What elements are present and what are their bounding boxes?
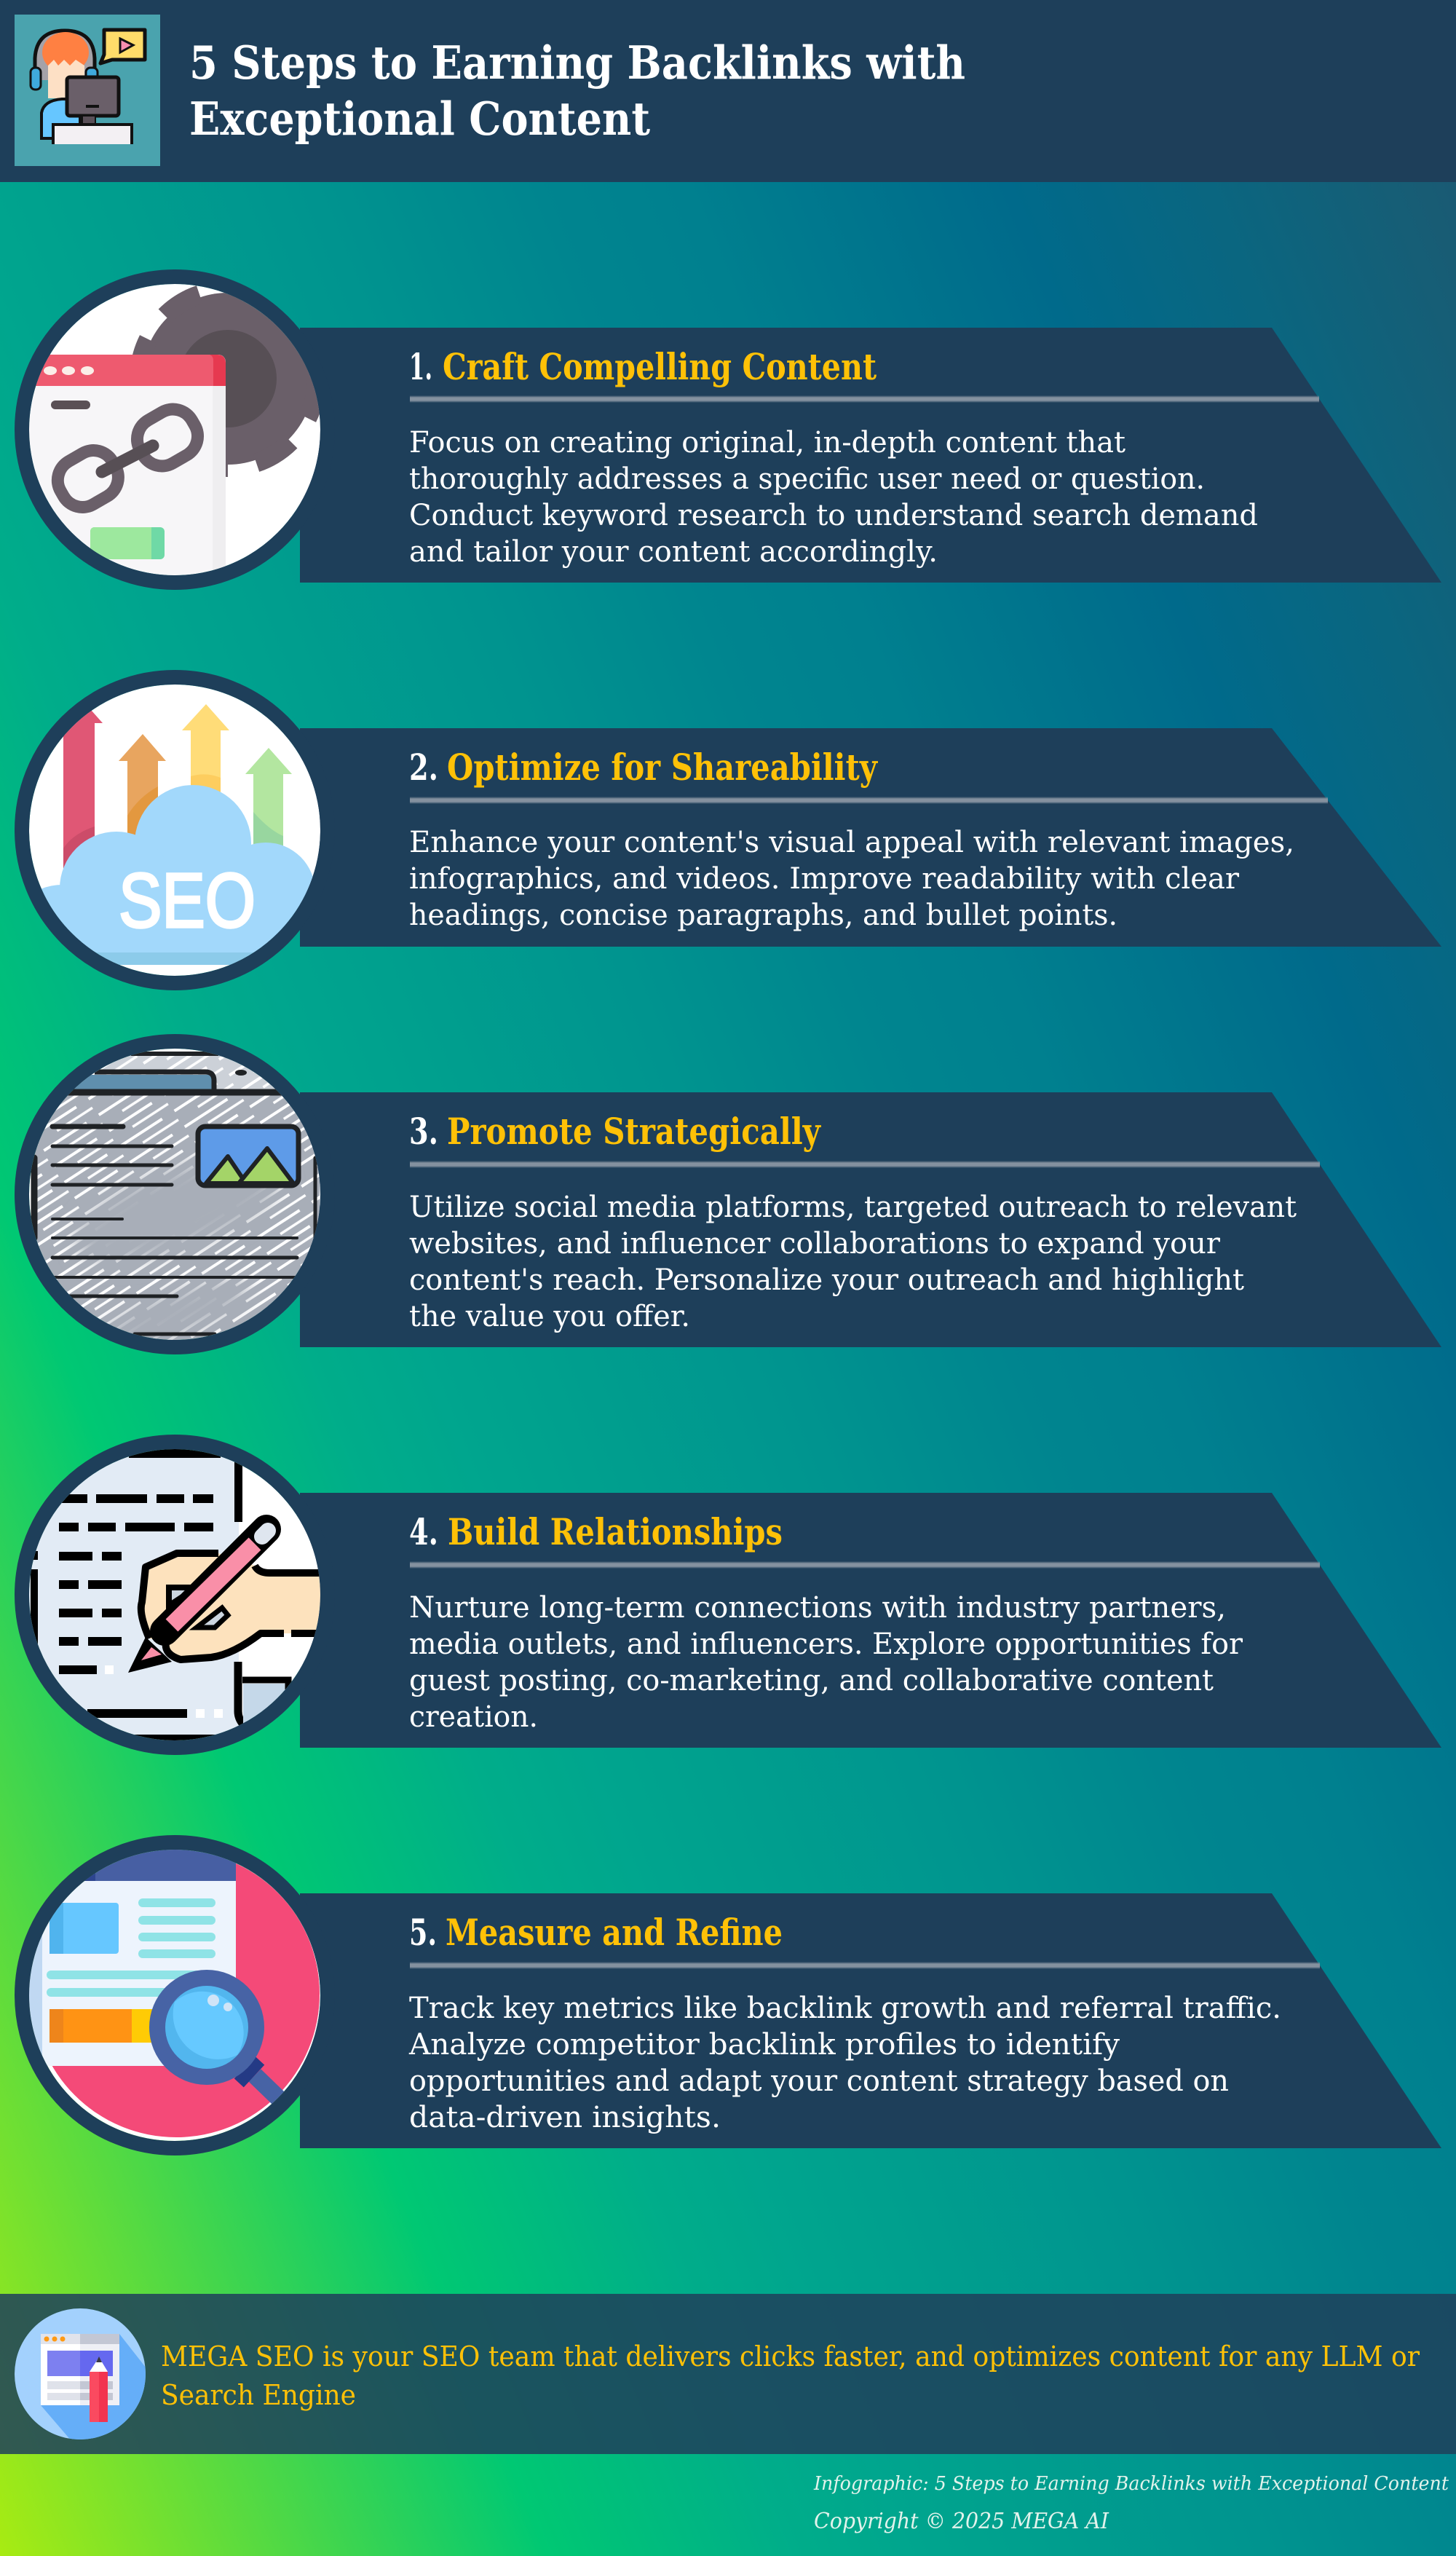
text: step 5 body: opportunities and adapt your content strategy based on: [409, 2064, 1229, 2098]
text: step 4 body: guest posting, co-marketing, and collaborative content: [409, 1664, 1214, 1697]
heading: step 5: 5.: [409, 1911, 437, 1954]
header bar: [0, 0, 1456, 182]
text: step 1 body: [409, 426, 1258, 569]
step 2: [7, 677, 1441, 994]
text: step 2 body: infographics, and videos. Improve readability with clear: [409, 862, 1240, 896]
icon: hand writing with pencil: [22, 1442, 328, 1748]
text: MEGA SEO promo: [161, 2340, 1420, 2411]
step 4: [22, 1442, 1441, 1748]
panel: step 1: [300, 328, 1441, 583]
heading: step 3: 3.: [409, 1110, 438, 1153]
text: step 1 body: Focus on creating original, in-depth content that: [409, 426, 1125, 459]
icon: web page with pencil: [15, 2308, 146, 2439]
panel: step 5: [300, 1893, 1441, 2148]
text: step 4 body: media outlets, and influencers. Explore opportunities for: [409, 1628, 1243, 1661]
heading: step 3: Promote Strategically: [447, 1110, 822, 1153]
text: step 4 body: Nurture long-term connections with industry partners,: [409, 1591, 1226, 1625]
text: step 3 body: Utilize social media platforms, targeted outreach to relevant: [409, 1191, 1297, 1224]
text: step 2 body: headings, concise paragraphs, and bullet points.: [409, 899, 1117, 932]
footer band: [0, 2294, 1456, 2454]
text: step 1 body: Conduct keyword research to understand search demand: [409, 499, 1258, 532]
text: MEGA SEO promo: Search Engine: [161, 2379, 356, 2411]
heading: step 1: 1.: [409, 345, 432, 388]
text: step 2 body: Enhance your content's visual appeal with relevant images,: [409, 826, 1294, 859]
text: MEGA SEO promo: MEGA SEO is your SEO team that delivers clicks faster, and optimizes content for any LLM or: [161, 2340, 1420, 2372]
step 3: [22, 1041, 1441, 1361]
heading: step 2: 2.: [409, 746, 438, 789]
credits: Copyright © 2025 MEGA AI: [814, 2509, 1109, 2534]
panel: step 2: [300, 728, 1441, 947]
text: step 3 body: [409, 1191, 1297, 1333]
panel: step 4: [300, 1493, 1441, 1748]
credits: Infographic: 5 Steps to Earning Backlinks with Exceptional Content: [813, 2473, 1449, 2495]
heading: step 5: Measure and Refine: [446, 1911, 783, 1954]
text: step 3 body: websites, and influencer collaborations to expand your: [409, 1227, 1221, 1261]
text: step 5 body: [408, 1992, 1281, 2134]
text: step 5 body: data-driven insights.: [409, 2101, 721, 2134]
heading: step 4: Build Relationships: [448, 1510, 783, 1553]
text: step 4 body: [409, 1591, 1243, 1734]
text: step 2 body: [409, 826, 1294, 932]
text: step 3 body: content's reach. Personalize your outreach and highlight: [409, 1263, 1244, 1297]
panel: step 3: [300, 1092, 1441, 1347]
title: [189, 36, 965, 146]
step 5: [22, 1842, 1441, 2148]
text: step 3 body: the value you offer.: [409, 1300, 690, 1333]
step 1: [22, 277, 1441, 597]
text: step 1 body: thoroughly addresses a specific user need or question.: [409, 462, 1205, 496]
text: step 5 body: Track key metrics like backlink growth and referral traffic.: [409, 1992, 1281, 2025]
credits: [813, 2473, 1449, 2534]
text: step 4 body: creation.: [409, 1700, 538, 1734]
icon: link and gear: [22, 277, 328, 597]
heading: step 2: Optimize for Shareability: [447, 746, 879, 789]
icon: person at computer: [15, 15, 160, 166]
heading: step 4: 4.: [409, 1510, 438, 1553]
icon: magnifier over page: [22, 1842, 328, 2148]
title: Exceptional Content: [189, 92, 650, 146]
text: step 5 body: Analyze competitor backlink profiles to identify: [408, 2028, 1120, 2062]
heading: step 1: Craft Compelling Content: [443, 345, 877, 388]
icon: SEO cloud with arrows: [7, 677, 328, 994]
icon: web page sketch: [22, 1041, 328, 1361]
title: 5 Steps to Earning Backlinks with: [189, 36, 965, 90]
text: step 1 body: and tailor your content accordingly.: [409, 535, 938, 569]
text: SEO: SEO: [119, 858, 256, 944]
